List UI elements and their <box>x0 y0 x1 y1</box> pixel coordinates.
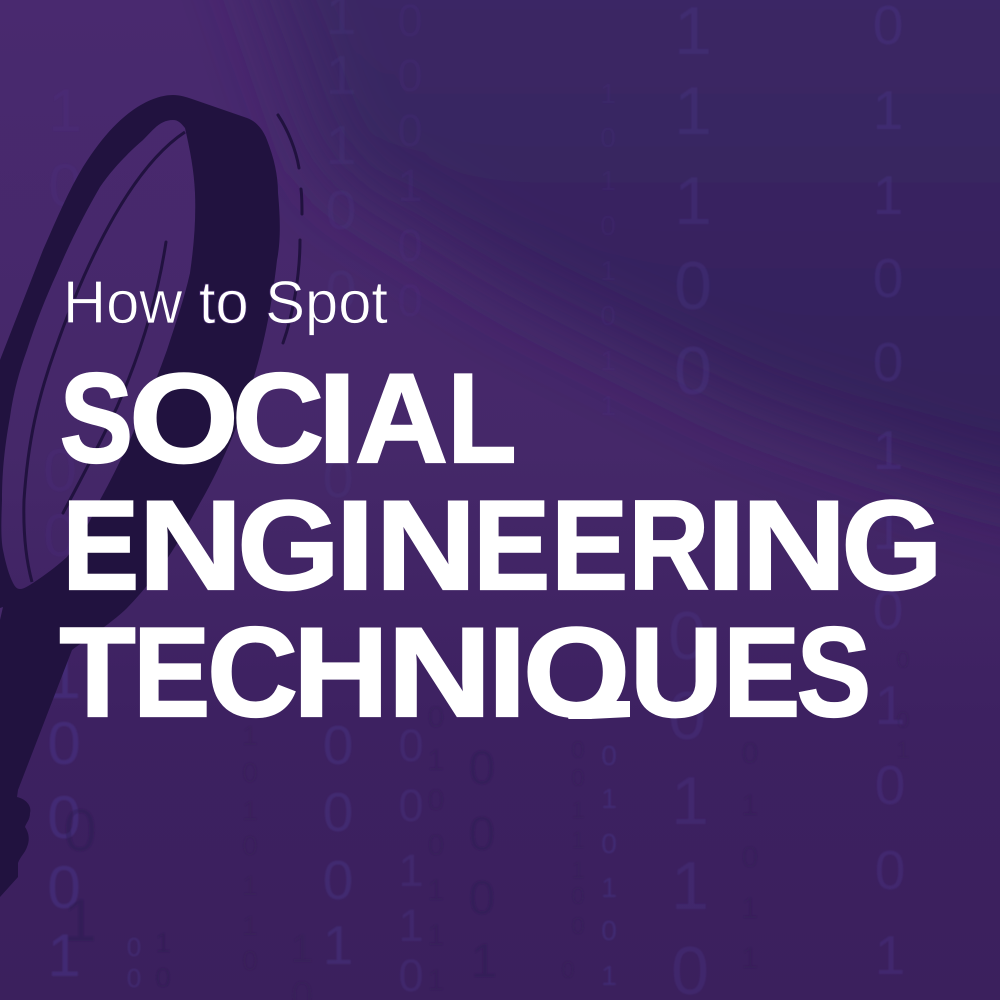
binary digits: left column: 10001 <box>47 644 81 989</box>
title line: SOCIAL: A <box>355 347 448 489</box>
binary digits: column at 410: 000100 <box>397 0 423 326</box>
binary digits: dark column at 905: 001 <box>896 647 910 764</box>
title line: ENGINEERING: G <box>237 474 340 616</box>
title <box>60 372 936 719</box>
lens second thin line <box>63 242 166 513</box>
binary digits: lower column at 338: 0001 <box>323 714 353 976</box>
title line: ENGINEERING: I <box>336 474 374 616</box>
binary digits: dark column at 250: 1010110 <box>242 720 258 976</box>
title line: ENGINEERING: N <box>138 474 243 616</box>
motion dash bottom <box>283 240 300 343</box>
binary digits: dark column at 482: 0001 <box>469 742 497 988</box>
title line: ENGINEERING: E <box>62 474 139 616</box>
binary digits: blue columns: 1110000110 <box>668 0 712 1000</box>
title line: TECHNIQUES: C <box>207 601 298 743</box>
title line: SOCIAL: O <box>129 347 239 489</box>
binary digits: dark column at 750: 01011 <box>742 737 758 975</box>
magnifier body and handle <box>0 95 280 897</box>
lens thin highlight line <box>24 132 185 582</box>
handle edge highlight <box>0 607 3 620</box>
binary digits: small lower centre column: 010101 <box>601 740 617 991</box>
title line: TECHNIQUES: T <box>60 601 136 743</box>
motion dash middle <box>301 189 302 214</box>
title line: TECHNIQUES: S <box>797 601 871 743</box>
title line: TECHNIQUES: N <box>387 601 492 743</box>
title line: ENGINEERING: E <box>551 474 628 616</box>
binary digits: small bottom-left column: 00 <box>127 932 141 993</box>
title line: SOCIAL: I <box>318 347 356 489</box>
title line: ENGINEERING: G <box>842 474 943 616</box>
binary digits: far right column: 011001101001 <box>873 0 905 986</box>
motion dash top <box>278 115 299 168</box>
binary digits: dark columns: 01 <box>63 797 97 954</box>
title line: TECHNIQUES: H <box>293 601 389 743</box>
Q tail <box>572 701 630 719</box>
title line: SOCIAL: S <box>60 347 133 489</box>
title line: TECHNIQUES: Q <box>523 601 630 743</box>
binary digits: dark column at 578: 00111000 <box>561 737 585 984</box>
title line: SOCIAL: L <box>448 347 516 489</box>
title line: TECHNIQUES: I <box>488 601 526 743</box>
binary digits: upper left column: 1000 <box>43 77 82 569</box>
title line: ENGINEERING: I <box>707 474 745 616</box>
title line: ENGINEERING: N <box>741 474 847 616</box>
title line: ENGINEERING: N <box>376 474 476 616</box>
title line: ENGINEERING: R <box>628 474 709 616</box>
title line: TECHNIQUES: E <box>723 601 800 743</box>
title line: TECHNIQUES: U <box>630 601 723 743</box>
binary digits: dark column at 436: 0100111 <box>428 701 444 997</box>
binary digits: dark column at 163: 10 <box>155 927 171 993</box>
title line: ENGINEERING: E <box>473 474 550 616</box>
title line: TECHNIQUES: E <box>133 601 210 743</box>
text block: subtitle: How to Spot <box>63 269 388 336</box>
icon: magnifying glass <box>0 95 302 897</box>
binary digits: small centre column: 10101011 <box>600 78 616 421</box>
binary digits: lower column at 411: 00110 <box>398 720 424 1000</box>
title line: SOCIAL: C <box>232 347 324 489</box>
